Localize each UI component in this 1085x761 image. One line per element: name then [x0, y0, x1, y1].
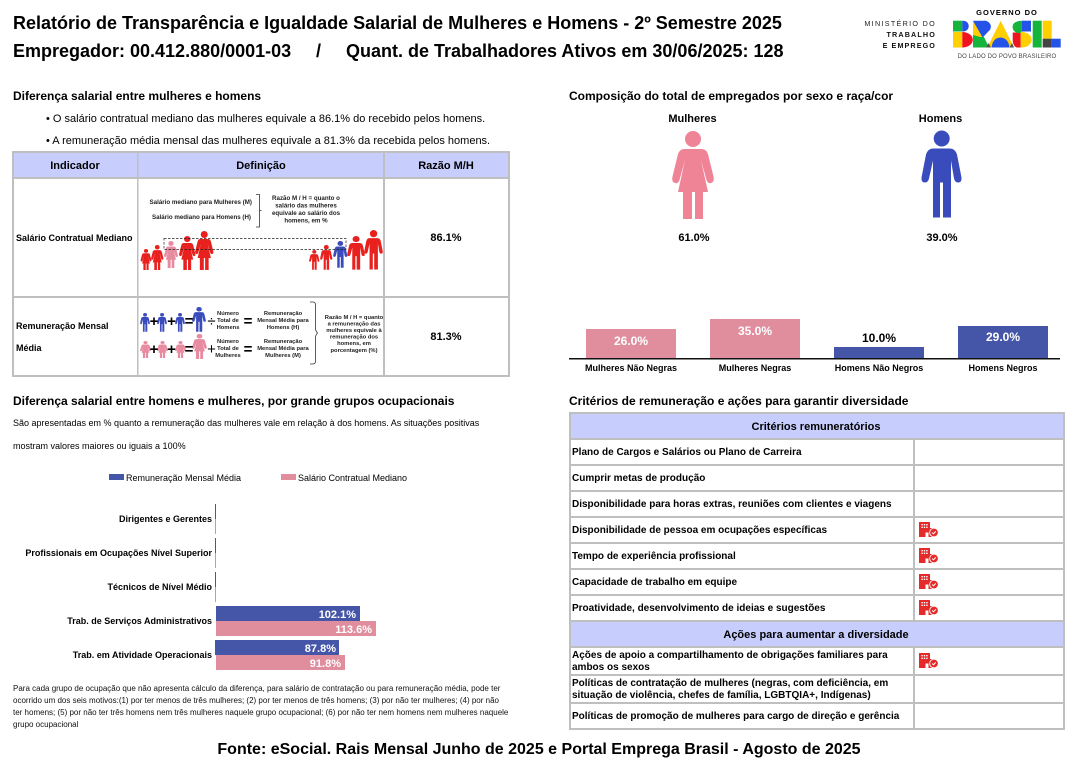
value: 81.3%: 81.3% [430, 331, 462, 343]
footnote: grupo ocupacional [13, 720, 79, 729]
logo: ministério: TRABALHO [886, 30, 936, 39]
bar: homens negros: 29.0% [986, 330, 1020, 344]
footnote: ocorrido um dos seis motivos:(1) por ter menos de três mulheres; (2) por ter menos de três homens; (3) por não ter mulheres; (4) por não [13, 696, 500, 705]
value: 86.1%: 86.1% [430, 232, 462, 244]
group: técnicos [107, 572, 216, 602]
text: bullets: • A remuneração média mensal das mulheres equivale a 81.3% da recebida pelos homens. [46, 135, 490, 147]
definition: remuneração diagram: = [244, 313, 253, 330]
text: explicação: mostram valores maiores ou iguais a 100% [13, 441, 186, 451]
bar: homens negros [958, 326, 1048, 373]
panel: critérios table [569, 412, 1065, 730]
title: Relatório de Transparência e Igualdade Salarial de Mulheres e Homens - 2º Semestre 2025 [13, 13, 782, 33]
formula: homens [140, 307, 206, 332]
definition: remuneração diagram: + [150, 341, 159, 358]
definition: remuneração diagram: porcentagem (%) [330, 348, 378, 354]
group: serviços administrativos: Trab. de Serviços Administrativos [67, 616, 212, 626]
definition: remuneração diagram: Número [217, 311, 239, 317]
definition: remuneração diagram: a remuneração das [328, 322, 380, 328]
definition: remuneração diagram: Mulheres (M) [265, 353, 301, 359]
bar: homens negros: Homens Negros [968, 363, 1038, 373]
definition: remuneração diagram: remuneração dos [330, 334, 378, 340]
row texts: critérios: Disponibilidade para horas extras, reuniões com clientes e viagens [572, 499, 892, 510]
table header: Indicador [50, 160, 100, 172]
legend: Remuneração Mensal Média [126, 473, 241, 483]
people: mulheres [141, 231, 213, 270]
group: atividade operacionais [73, 640, 345, 670]
definition: remuneração diagram: homens, em [337, 341, 371, 347]
group: serviços administrativos [67, 606, 376, 636]
group: dirigentes: Dirigentes e Gerentes [119, 514, 212, 524]
definition: remuneração diagram: Total de [217, 318, 240, 324]
footnote: ter homens; (5) por não ter três homens nem três mulheres naquele grupo ocupacional; (6) por não ter nem homens nem mulheres naquele [13, 708, 509, 717]
legend [109, 473, 407, 483]
row texts: ações: ambos os sexos [572, 662, 650, 673]
definition: remuneração diagram: + [167, 313, 176, 330]
bar: mulheres não negras [585, 329, 677, 373]
definition: remuneração diagram: Total de [217, 346, 240, 352]
definition: remuneração diagram: Mensal Média para [257, 346, 310, 352]
definition: remuneração diagram: + [150, 313, 159, 330]
title: / [316, 41, 321, 61]
bar: mulheres não negras: Mulheres Não Negras [585, 363, 677, 373]
group: atividade operacionais: 91.8% [310, 658, 341, 670]
row texts: ações: situação de violência, chefes de família, LGBTQIA+, Indígenas) [572, 690, 871, 701]
legend: Salário Contratual Mediano [298, 473, 407, 483]
pictogram: homens [919, 113, 962, 244]
row texts: ações: Ações de apoio a compartilhamento de obrigações familiares para [572, 650, 888, 661]
bar: mulheres negras [710, 319, 800, 373]
header: ações: Ações para aumentar a diversidade [723, 629, 909, 641]
definition: remuneração diagram: Homens [217, 325, 239, 331]
definition: salário mediano diagram: Salário mediano para Mulheres (M) [150, 199, 252, 206]
definition: salário mediano diagram: salário das mulheres [275, 202, 337, 210]
bar chart: composição por raça/cor [569, 319, 1060, 373]
table header [50, 160, 474, 172]
title: Quant. de Trabalhadores Ativos em 30/06/2025: 128 [346, 41, 784, 61]
icons: building check [919, 522, 939, 668]
definition: remuneração diagram: Remuneração [264, 339, 303, 345]
title: Empregador: 00.412.880/0001-03 [13, 41, 291, 61]
row label: remuneração [16, 321, 109, 353]
definition: remuneração diagram: = [185, 313, 194, 330]
pictogram: homens: 39.0% [926, 232, 958, 244]
definition: remuneração diagram: = [244, 341, 253, 358]
text: explicação: São apresentadas em % quanto a remuneração das mulheres vale em relação à dos homens. As situações positivas [13, 418, 480, 428]
group: dirigentes [119, 504, 216, 534]
heading: grupos ocupacionais: Diferença salarial entre homens e mulheres, por grande grupos ocupacionais [13, 394, 455, 408]
heading: composição: Composição do total de empregados por sexo e raça/cor [569, 89, 893, 103]
people: homens [309, 230, 383, 270]
group: profissionais: Profissionais em Ocupações Nível Superior [25, 548, 212, 558]
definition: remuneração diagram: Mensal Média para [257, 318, 310, 324]
panel: indicator table [12, 151, 510, 377]
definition: remuneração diagram: = [185, 341, 194, 358]
footnote [13, 684, 509, 729]
row texts: critérios [572, 447, 892, 614]
pictogram: mulheres: Mulheres [668, 113, 717, 125]
group: atividade operacionais: Trab. em Atividade Operacionais [73, 650, 212, 660]
table header: Definição [236, 160, 286, 172]
row texts: critérios: Disponibilidade de pessoa em ocupações específicas [572, 525, 828, 536]
header: critérios remuneratórios: Critérios remuneratórios [752, 421, 880, 433]
pictogram: homens: Homens [919, 113, 962, 125]
definition: salário mediano diagram [141, 194, 383, 270]
row texts: ações [572, 650, 900, 722]
definition: remuneração diagram [140, 302, 384, 364]
definition: remuneração diagram: + [207, 341, 216, 358]
logo: ministério: MINISTÉRIO DO [864, 19, 936, 28]
definition: remuneração diagram: Mulheres [215, 353, 241, 359]
logo: ministério: E EMPREGO [883, 41, 936, 50]
row texts: critérios: Capacidade de trabalho em equipe [572, 577, 737, 588]
heading: critérios: Critérios de remuneração e ações para garantir diversidade [569, 394, 909, 408]
row texts: critérios: Plano de Cargos e Salários ou Plano de Carreira [572, 447, 802, 458]
row texts: critérios: Proatividade, desenvolvimento de ideias e sugestões [572, 603, 826, 614]
definition: remuneração diagram: Número [217, 339, 239, 345]
row label: remuneração: Remuneração Mensal [16, 321, 109, 331]
bar: mulheres não negras: 26.0% [614, 334, 648, 348]
logo: governo do brasil: GOVERNO DO [976, 8, 1038, 17]
definition: remuneração diagram: Homens (H) [267, 325, 299, 331]
row texts: critérios: Cumprir metas de produção [572, 473, 705, 484]
definition: salário mediano diagram: Salário mediano para Homens (H) [152, 214, 251, 221]
definition: remuneração diagram: + [167, 341, 176, 358]
row label: salário contratual: Salário Contratual Mediano [16, 233, 133, 243]
group: serviços administrativos: 113.6% [335, 624, 372, 636]
group: atividade operacionais: 87.8% [305, 643, 336, 655]
logo: governo do brasil: DO LADO DO POVO BRASILEIRO [958, 54, 1057, 60]
text: bullets: • O salário contratual mediano das mulheres equivale a 86.1% do recebido pelos homens. [46, 113, 485, 125]
text: explicação [13, 418, 480, 451]
bar: mulheres negras: 35.0% [738, 324, 772, 338]
bar: homens não negros: 10.0% [862, 331, 896, 345]
row label: remuneração: Média [16, 343, 43, 353]
pictogram: mulheres: 61.0% [678, 232, 710, 244]
bar: homens não negros [834, 331, 924, 373]
definition: remuneração diagram: ÷ [207, 313, 216, 330]
group: técnicos: Técnicos de Nível Médio [107, 582, 212, 592]
text: bullets [46, 113, 490, 147]
group: serviços administrativos: 102.1% [319, 609, 356, 621]
definition: salário mediano diagram: Razão M / H = quanto o [272, 195, 340, 202]
definition: remuneração diagram: mulheres equivale à [326, 328, 382, 334]
logo: ministério [864, 19, 936, 50]
pictogram: mulheres [668, 113, 717, 244]
heading: diferença salarial: Diferença salarial entre mulheres e homens [13, 89, 261, 103]
footnote: Para cada grupo de ocupação que não apresenta cálculo da diferença, para salário de contratação ou para remuneração média, pode ter [13, 684, 501, 693]
row texts: ações: Políticas de contratação de mulheres (negras, com deficiência, em [572, 678, 888, 689]
definition: salário mediano diagram: equivale ao salário dos [272, 210, 341, 217]
bar: mulheres negras: Mulheres Negras [719, 363, 791, 373]
formula: mulheres [140, 334, 207, 359]
footer: fonte: Fonte: eSocial. Rais Mensal Junho de 2025 e Portal Emprega Brasil - Agosto de 2025 [217, 741, 861, 758]
bar: homens não negros: Homens Não Negros [835, 363, 923, 373]
title [13, 13, 784, 61]
row texts: ações: Políticas de promoção de mulheres para cargo de direção e gerência [572, 711, 900, 722]
row texts: critérios: Tempo de experiência profissional [572, 551, 736, 562]
definition: remuneração diagram: Razão M / H = quanto [325, 315, 384, 321]
definition: remuneração diagram: Remuneração [264, 311, 303, 317]
table header: Razão M/H [418, 160, 474, 172]
bar chart: grupos ocupacionais [25, 504, 376, 670]
logo: governo do brasil [953, 8, 1061, 60]
definition: salário mediano diagram: homens, em % [284, 218, 328, 224]
